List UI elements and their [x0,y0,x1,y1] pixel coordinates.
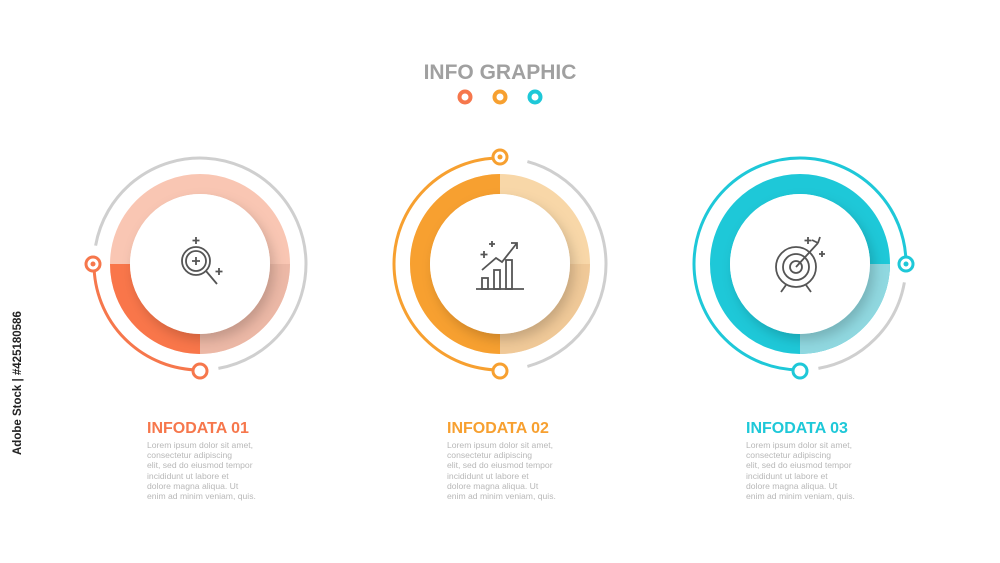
circle 1 [86,158,306,378]
text 3: consectetur adipiscing [746,450,831,460]
text 1: consectetur adipiscing [147,450,232,460]
text 2: Lorem ipsum dolor sit amet, [447,440,553,450]
text 3: incididunt ut labore et [746,471,828,481]
icon: chart [476,241,524,289]
title dots [460,92,540,102]
text 1 [147,420,256,501]
circle 2 [394,150,606,378]
text 2 [447,420,556,501]
text 3 [746,420,855,501]
text 1: Lorem ipsum dolor sit amet, [147,440,253,450]
text 1: incididunt ut labore et [147,471,229,481]
circle 3 [694,158,913,378]
title: INFO GRAPHIC [424,61,576,84]
text 3: dolore magna aliqua. Ut [746,481,837,491]
text 1: enim ad minim veniam, quis. [147,491,256,501]
text 1: INFODATA 01 [147,420,249,437]
text 1: elit, sed do eiusmod tempor [147,460,253,470]
text 2: dolore magna aliqua. Ut [447,481,538,491]
icon: magnifier [182,237,222,284]
text 2: incididunt ut labore et [447,471,529,481]
text 3: INFODATA 03 [746,420,848,437]
text 2: elit, sed do eiusmod tempor [447,460,553,470]
text 2: enim ad minim veniam, quis. [447,491,556,501]
text 3: Lorem ipsum dolor sit amet, [746,440,852,450]
text 1: dolore magna aliqua. Ut [147,481,238,491]
text 3: elit, sed do eiusmod tempor [746,460,852,470]
icon: target [776,237,825,292]
side id: Adobe Stock | #425180586 [12,311,24,455]
text 3: enim ad minim veniam, quis. [746,491,855,501]
text 2: consectetur adipiscing [447,450,532,460]
text 2: INFODATA 02 [447,420,549,437]
